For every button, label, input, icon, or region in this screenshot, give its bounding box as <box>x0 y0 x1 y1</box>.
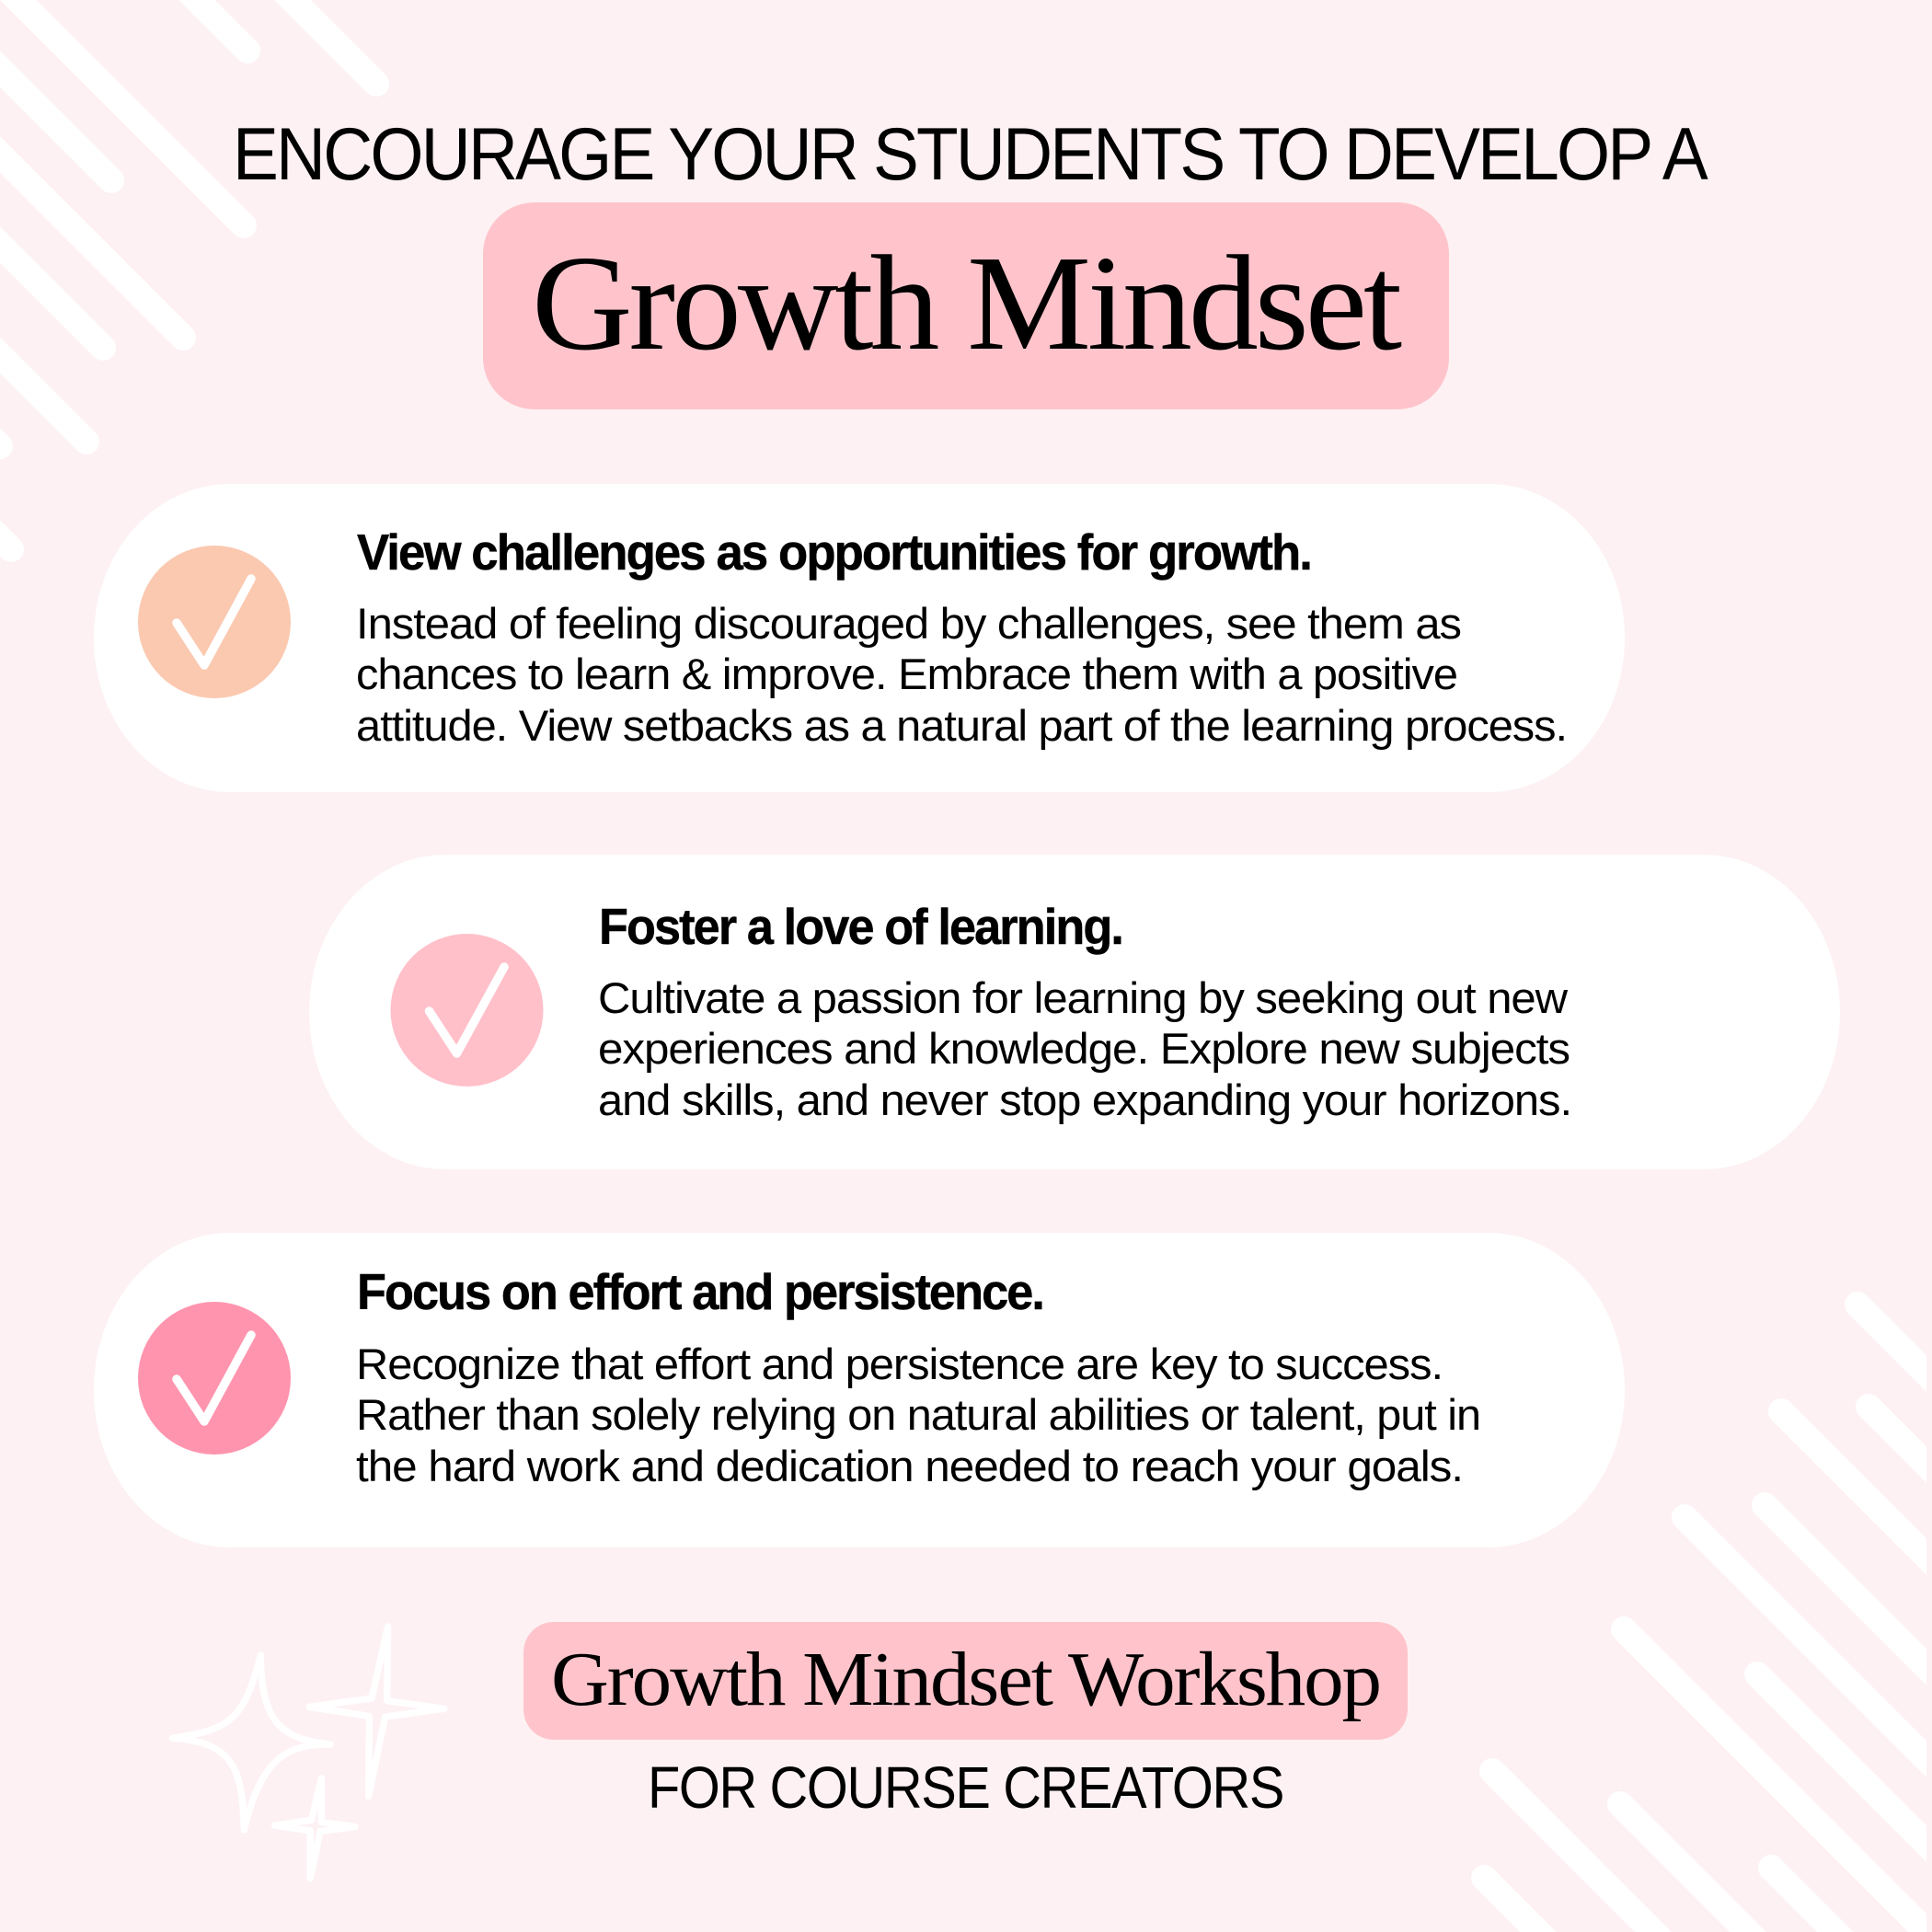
card 3 body: the hard work and dedication needed to reach your goals. <box>356 1442 1463 1490</box>
footer subtitle: FOR COURSE CREATORS <box>648 1754 1283 1821</box>
panel: card 2 love of learning <box>309 855 1840 1169</box>
card 1 body: attitude. View setbacks as a natural part of the learning process. <box>356 701 1567 750</box>
card 2 body: Cultivate a passion for learning by seeking out new <box>598 973 1569 1022</box>
card 1 heading: View challenges as opportunities for growth. <box>357 523 1311 581</box>
title: Growth Mindset: Growth Mindset <box>532 228 1402 379</box>
card 3 heading: Focus on effort and persistence. <box>357 1263 1043 1320</box>
card 2 body: and skills, and never stop expanding your horizons. <box>598 1075 1571 1124</box>
panel: card 1 challenges <box>94 484 1625 792</box>
card 1 body: chances to learn & improve. Embrace them with a positive <box>356 650 1457 698</box>
icon: sparkle stars <box>172 1627 444 1879</box>
icon: rose check <box>138 1302 291 1455</box>
icon: peach check <box>138 546 291 698</box>
card 1 background <box>94 484 1625 792</box>
card 3 body: Rather than solely relying on natural abilities or talent, put in <box>356 1390 1480 1439</box>
footer pill <box>523 1622 1408 1740</box>
icon: pink check <box>390 934 543 1087</box>
decorative stripes: bottom right <box>1471 1292 1926 1932</box>
heading: encourage line: ENCOURAGE YOUR STUDENTS TO DEVELOP A <box>233 113 1708 196</box>
title pill <box>483 202 1449 409</box>
footer title: Growth Mindset Workshop: Growth Mindset Workshop <box>551 1637 1380 1722</box>
card 3 body <box>356 1340 1480 1490</box>
card 3 background <box>94 1233 1625 1547</box>
card 2 body <box>598 973 1571 1124</box>
card 2 heading: Foster a love of learning. <box>599 898 1122 955</box>
card 2 body: experiences and knowledge. Explore new subjects <box>598 1024 1570 1073</box>
card 1 body <box>356 599 1567 750</box>
card 1 body: Instead of feeling discouraged by challenges, see them as <box>356 599 1461 648</box>
card 2 background <box>309 855 1840 1169</box>
decorative stripes: top left <box>0 0 389 562</box>
panel: card 3 effort and persistence <box>94 1233 1625 1547</box>
card 3 body: Recognize that effort and persistence are key to success. <box>356 1340 1443 1388</box>
